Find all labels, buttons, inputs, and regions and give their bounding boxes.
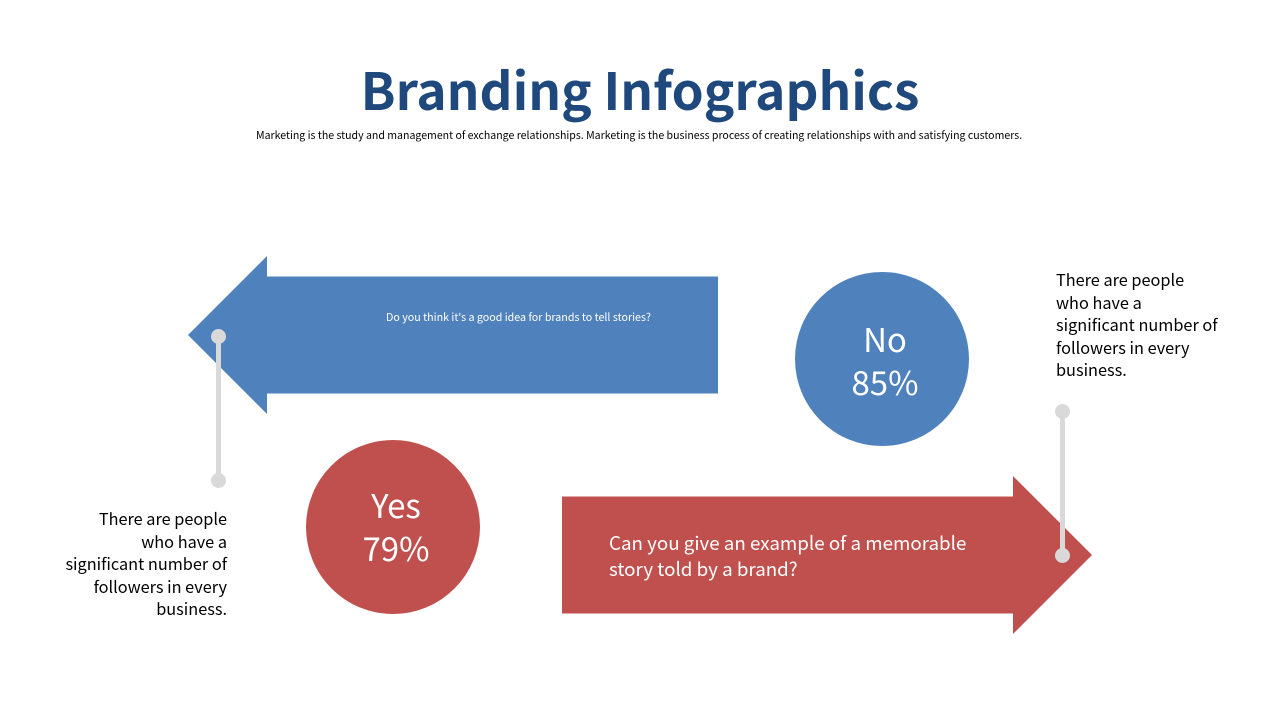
- right note: significant number of: [1056, 312, 1218, 336]
- red arrow text: Can you give an example of a memorable: [609, 529, 966, 556]
- red arrow text: story told by a brand?: [609, 555, 798, 582]
- right note: who have a: [1056, 290, 1142, 314]
- left note: business.: [156, 596, 227, 620]
- no percentage: [851, 314, 919, 405]
- circle: no: [795, 272, 969, 446]
- right note: [1056, 267, 1218, 381]
- right note: business.: [1056, 357, 1127, 381]
- circle: yes: [306, 440, 480, 614]
- left note: who have a: [141, 528, 227, 552]
- red arrow text: [609, 529, 966, 582]
- yes percentage: 79%: [362, 523, 430, 571]
- connector: left pin: [211, 329, 226, 488]
- no percentage: No: [863, 314, 907, 362]
- yes percentage: [362, 480, 430, 571]
- right note: There are people: [1056, 267, 1184, 291]
- left note: There are people: [99, 506, 227, 530]
- blue arrow text: Do you think it's a good idea for brands to tell stories?: [386, 310, 651, 325]
- no percentage: 85%: [851, 357, 919, 405]
- right note: followers in every: [1056, 334, 1189, 358]
- arrow: red right: [562, 476, 1092, 634]
- connector: right pin: [1055, 404, 1070, 563]
- arrow: blue left: [188, 256, 718, 414]
- left note: significant number of: [65, 551, 227, 575]
- title: Branding Infographics: [361, 50, 919, 125]
- left note: [65, 506, 228, 620]
- left note: followers in every: [94, 574, 227, 598]
- yes percentage: Yes: [371, 480, 421, 528]
- subtitle: Marketing is the study and management of exchange relationships. Marketing is the business process of creating relationships with and satisfying customers.: [256, 128, 1022, 143]
